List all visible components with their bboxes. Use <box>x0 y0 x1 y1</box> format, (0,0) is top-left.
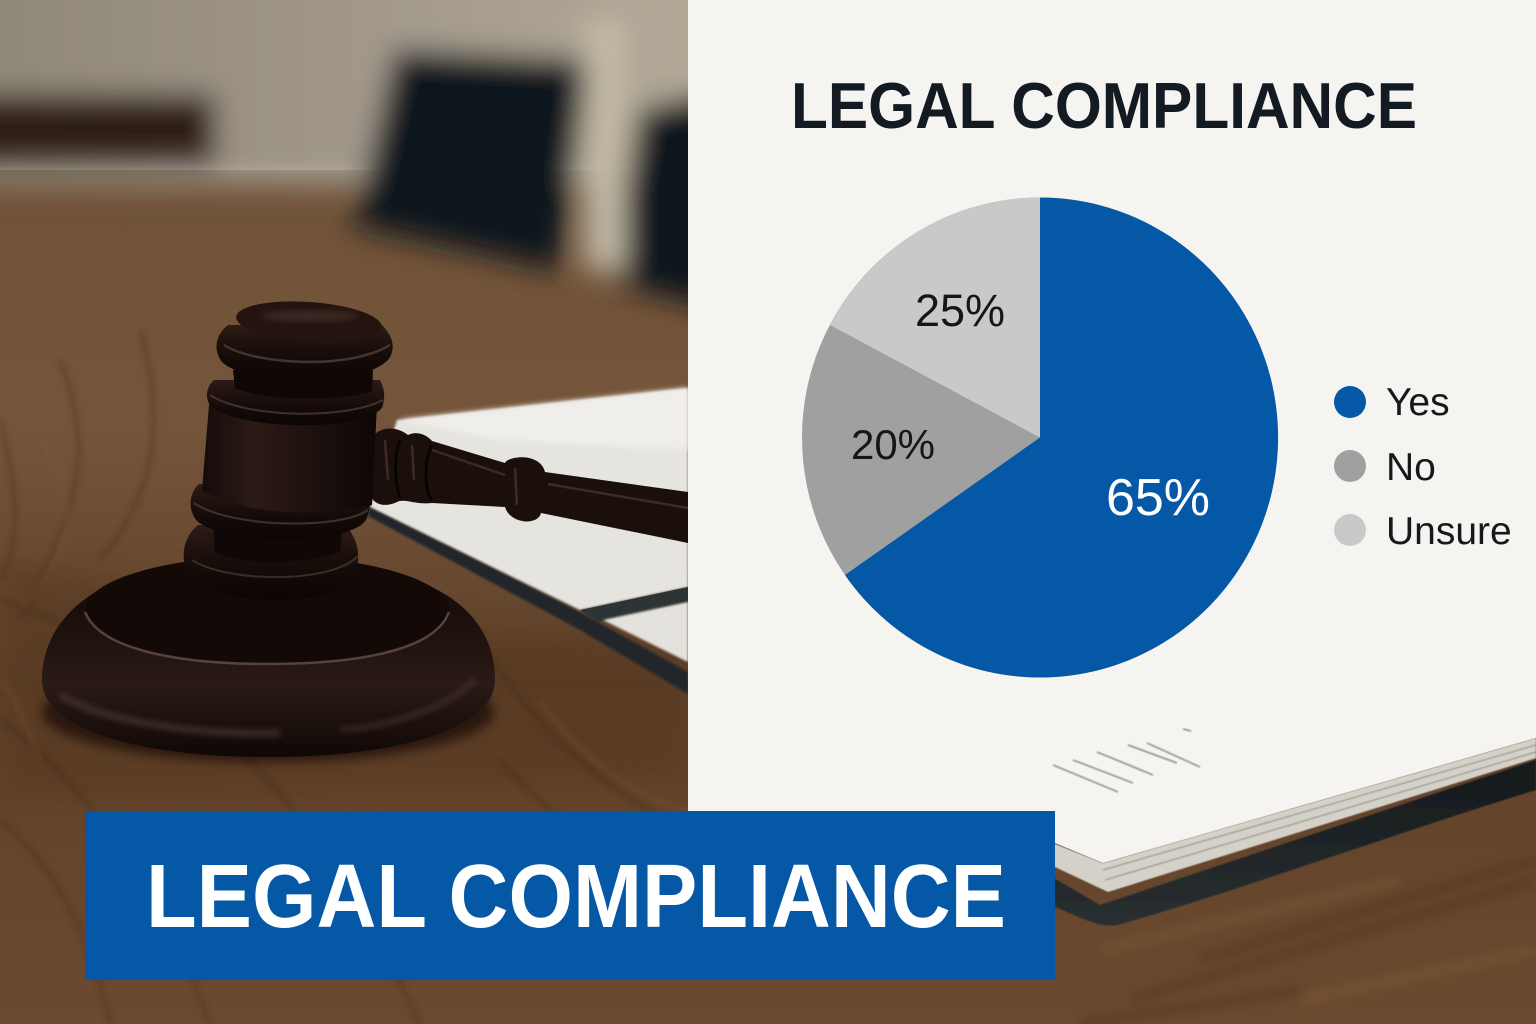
slice: yes 65% <box>845 197 1278 677</box>
legend item: unsure: Unsure <box>1386 510 1512 553</box>
document: binder and page stack <box>1040 738 1536 926</box>
wood grain <box>0 332 419 1021</box>
upper neck <box>233 370 373 398</box>
sound block <box>42 556 495 762</box>
value: 20%: 20% <box>851 421 935 468</box>
gavel handle <box>370 428 688 543</box>
value: 65%: 65% <box>1106 469 1210 527</box>
second paper <box>603 602 688 662</box>
legend <box>1334 381 1512 553</box>
photo: document folder under gavel <box>368 388 688 694</box>
value: 25%: 25% <box>915 285 1005 336</box>
main paper <box>370 388 688 610</box>
gavel head <box>184 297 393 600</box>
small blurred document text <box>1053 729 1200 792</box>
panel: white chart sheet <box>688 0 1536 926</box>
lower neck <box>213 520 343 562</box>
legend item: yes <box>1334 381 1450 424</box>
photo: boardroom background <box>0 0 740 1024</box>
banner: legal compliance <box>85 811 1055 980</box>
slice: unsure 25% <box>830 198 1040 438</box>
banner: legal compliance: LEGAL COMPLIANCE <box>146 847 1006 947</box>
legend item: no <box>1334 446 1436 489</box>
photo: lower right wood grain <box>1080 860 1536 1024</box>
top cap <box>235 297 383 347</box>
pie chart <box>802 197 1278 677</box>
photo: gavel and sound block <box>42 297 688 762</box>
body <box>202 405 377 513</box>
folder cover <box>368 505 688 694</box>
legend item: no: No <box>1386 446 1436 489</box>
slice: no 20% <box>802 198 1278 678</box>
upper collar <box>207 380 384 425</box>
heading: chart title: LEGAL COMPLIANCE <box>791 69 1417 142</box>
top ring <box>216 325 393 380</box>
legend item: yes: Yes <box>1386 381 1450 424</box>
lower collar <box>191 484 370 539</box>
divider <box>580 587 688 622</box>
bottom ring <box>184 525 358 600</box>
